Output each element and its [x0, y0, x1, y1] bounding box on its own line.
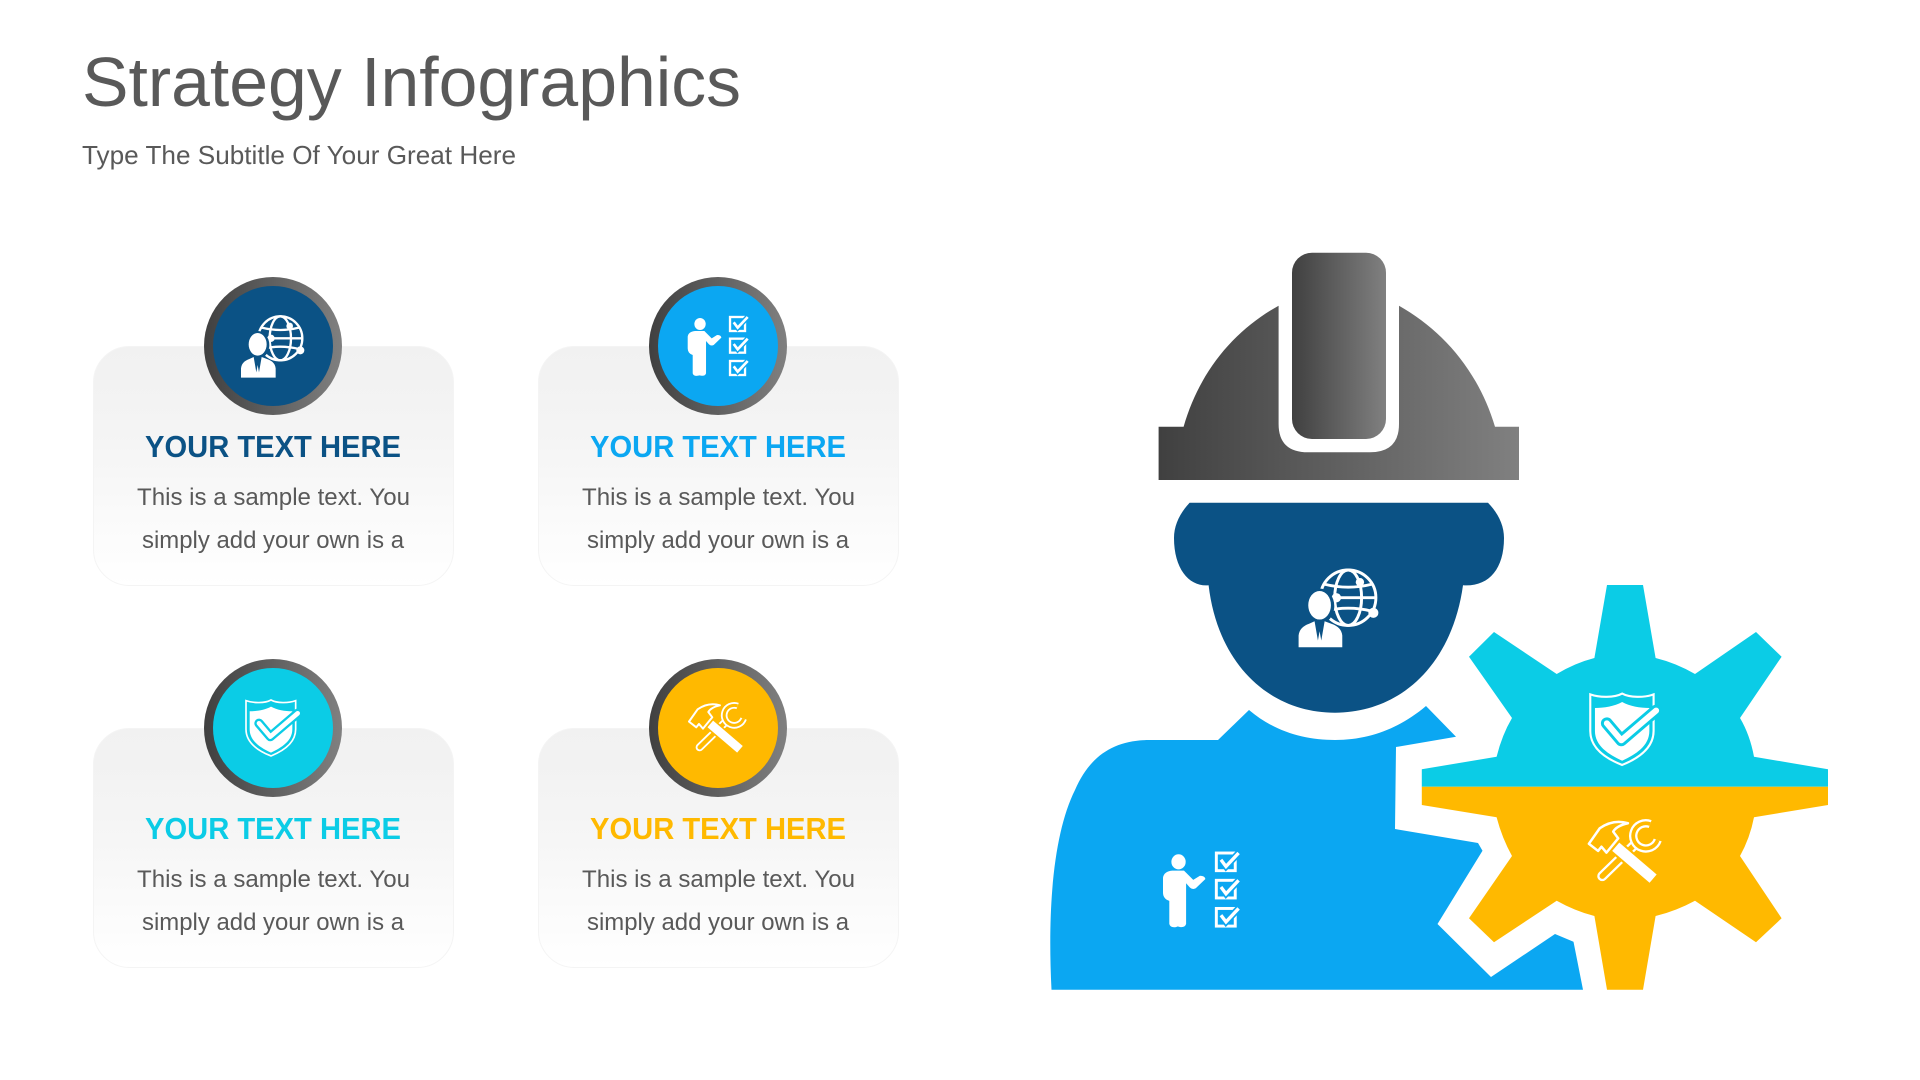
- gear bottom half: [1422, 787, 1828, 990]
- icon: globe person badge: [204, 277, 342, 415]
- icon: tools badge: [649, 659, 787, 797]
- title: Strategy Infographics: [82, 43, 741, 121]
- card 3 body text: This is a sample text. You: [137, 866, 410, 893]
- panel: card 1: [94, 277, 454, 586]
- helmet: [1159, 253, 1519, 480]
- card 2 body text: This is a sample text. You: [582, 484, 855, 511]
- panel: card 4: [538, 659, 898, 968]
- card 3 body text: [137, 866, 410, 936]
- card 2 heading: YOUR TEXT HERE: [590, 429, 846, 464]
- icon: checklist presenter on body: [1163, 853, 1239, 927]
- panel: card 2: [538, 277, 898, 586]
- icon: globe person on head: [1296, 570, 1378, 647]
- subtitle: Type The Subtitle Of Your Great Here: [82, 140, 516, 170]
- icon: shield badge: [204, 659, 342, 797]
- card 1 body text: This is a sample text. You: [137, 484, 410, 511]
- card 4 body text: simply add your own is a: [587, 909, 850, 936]
- icon: tools on gear: [1589, 822, 1658, 879]
- card 3 heading: YOUR TEXT HERE: [145, 811, 401, 846]
- card 2 body text: simply add your own is a: [587, 527, 850, 554]
- card 1 heading: YOUR TEXT HERE: [145, 429, 401, 464]
- icon: shield on gear: [1590, 694, 1656, 765]
- card 2 body text: [582, 484, 855, 554]
- card 1 body text: simply add your own is a: [142, 527, 405, 554]
- card 4 body text: [582, 866, 855, 936]
- card 4 body text: This is a sample text. You: [582, 866, 855, 893]
- card 3 body text: simply add your own is a: [142, 909, 405, 936]
- icon: checklist presenter badge: [649, 277, 787, 415]
- panel: card 3: [94, 659, 454, 968]
- card 1 body text: [137, 484, 410, 554]
- worker and gear illustration: [1050, 253, 1828, 990]
- card 4 heading: YOUR TEXT HERE: [590, 811, 846, 846]
- gear top half: [1422, 585, 1828, 787]
- head: [1174, 503, 1504, 713]
- body: [1050, 706, 1583, 990]
